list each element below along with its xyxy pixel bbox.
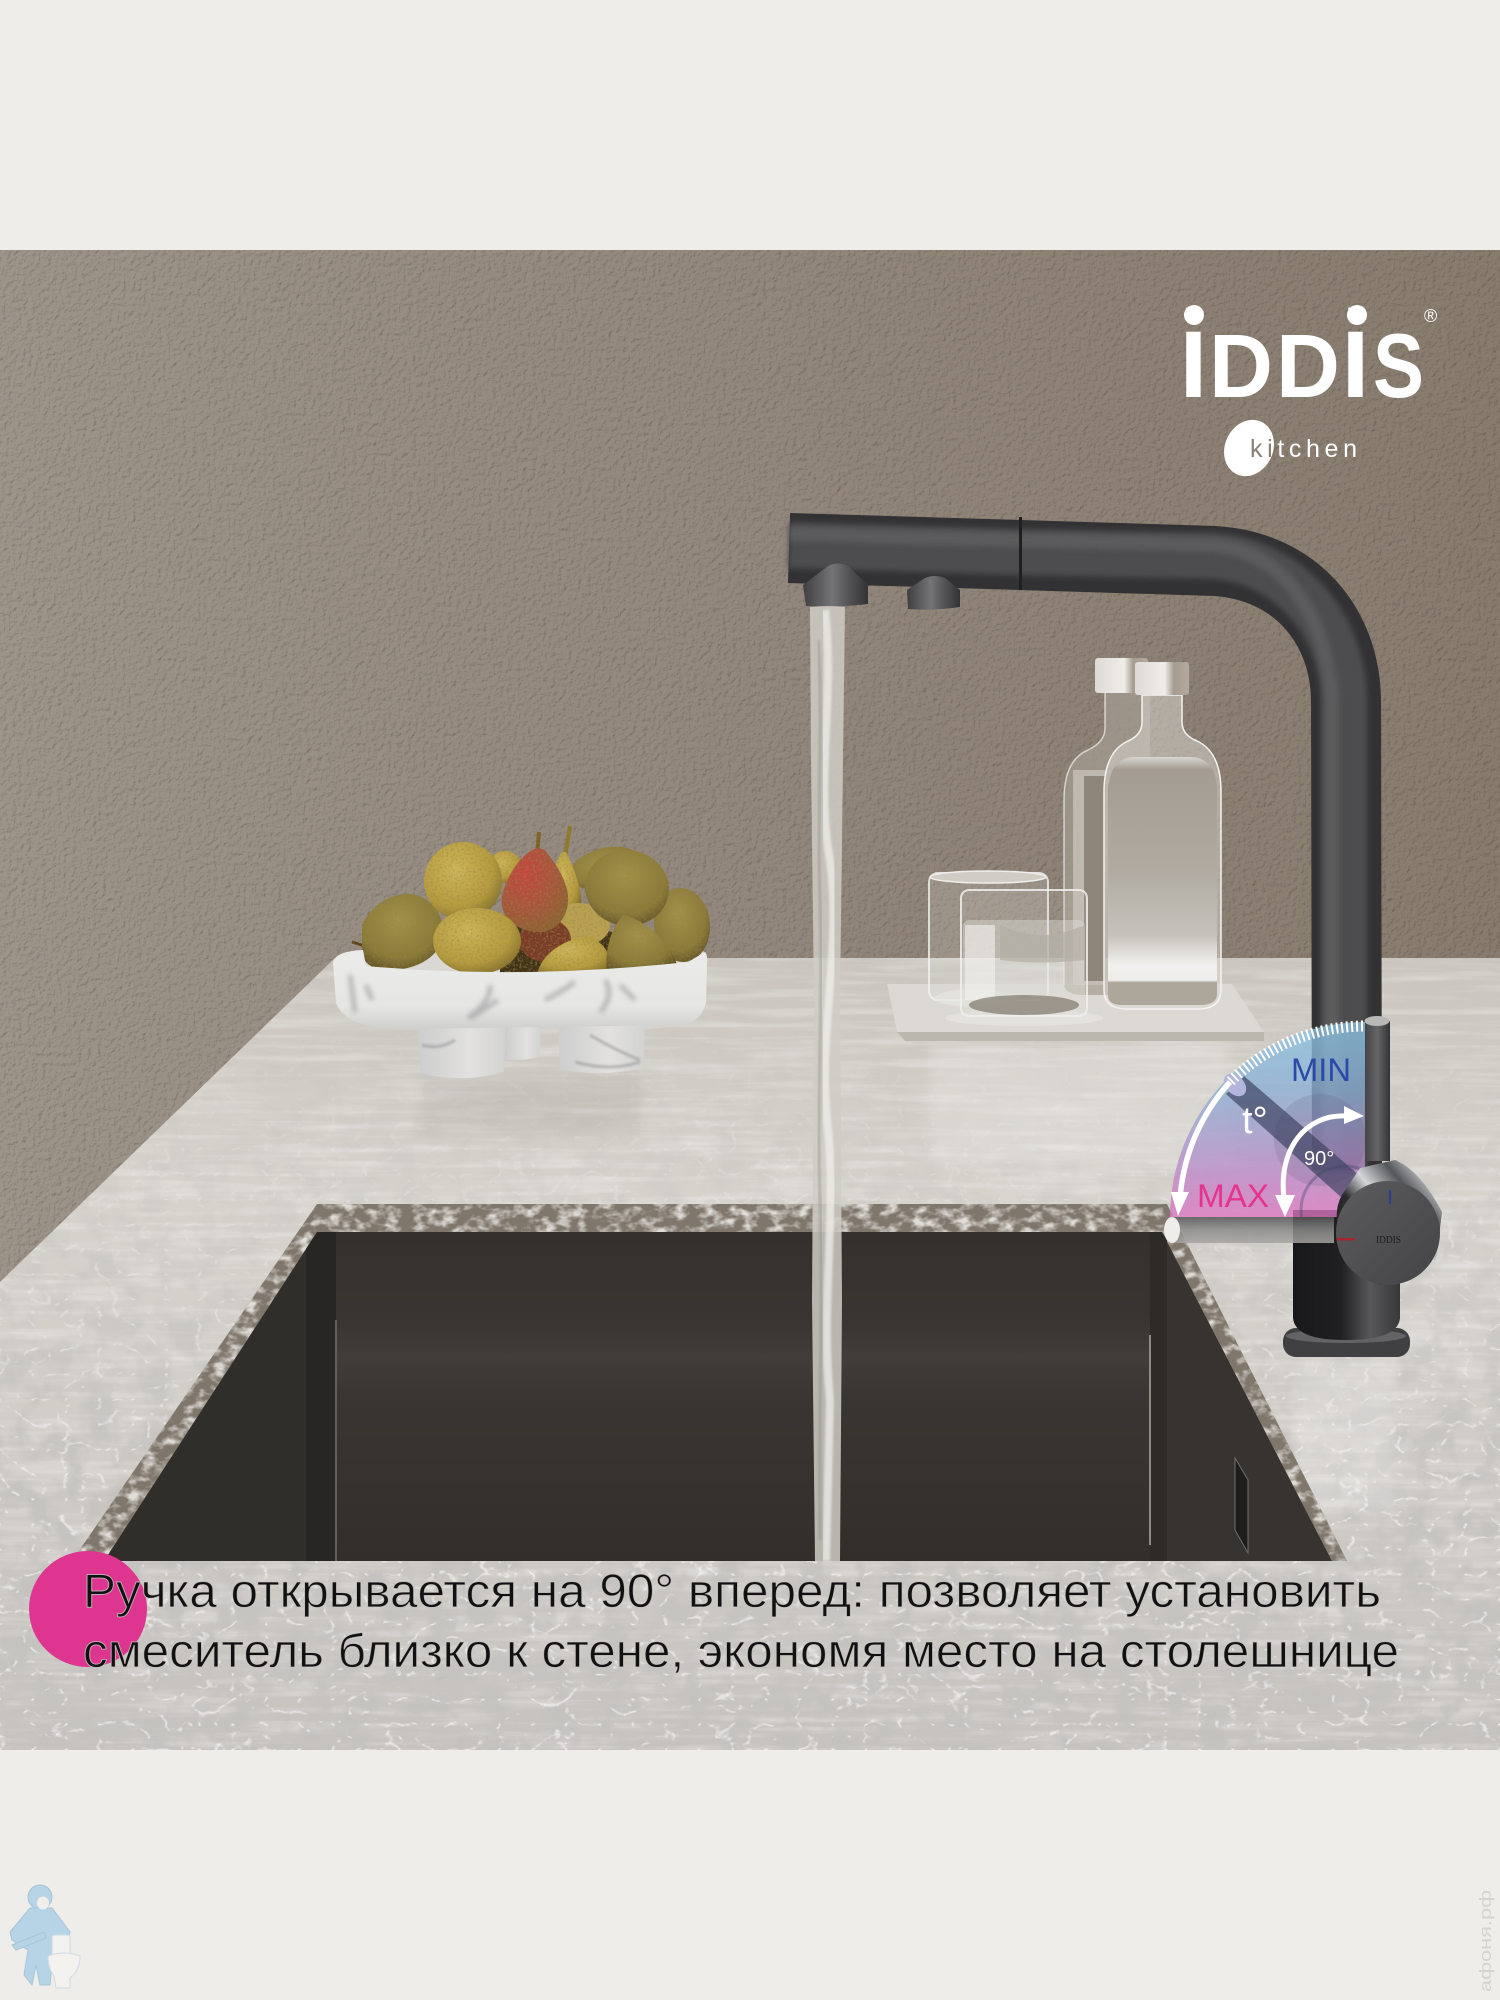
- temperature quadrant diagram: [1164, 1020, 1365, 1243]
- handle cylinder: [1337, 1160, 1442, 1285]
- label MAX: MAX: [1197, 1178, 1269, 1214]
- wordmark: D: [1209, 317, 1273, 417]
- plumber figure: [10, 1885, 70, 1985]
- tray with bottles and glasses: [887, 658, 1264, 1041]
- lever at max position: [1164, 1217, 1334, 1243]
- logo: iddis: [1179, 287, 1437, 484]
- caption: [29, 1551, 1399, 1677]
- back glass: [929, 871, 1048, 1007]
- faucet body: [1293, 1210, 1400, 1340]
- kitchen mark: [1215, 412, 1357, 484]
- faucet spout: [789, 517, 1347, 1170]
- water stream: [810, 606, 845, 1561]
- outer arrow to max: [1171, 1082, 1230, 1216]
- faucet base plate: [1283, 1328, 1410, 1357]
- sink stone rim: [72, 1204, 1347, 1561]
- pink blob: [29, 1551, 147, 1667]
- handle disc: [1336, 1181, 1440, 1285]
- bowl back rim: [340, 945, 707, 975]
- back bottle: [1064, 658, 1150, 995]
- handle logo: IDDIS: [1376, 1235, 1401, 1246]
- sink left wall: [104, 1232, 336, 1561]
- label MIN: MIN: [1291, 1052, 1351, 1088]
- registered mark: ®: [1424, 306, 1437, 326]
- countertop: [0, 958, 1500, 1750]
- wordmark: i: [1341, 287, 1370, 424]
- bowl rim: [333, 950, 707, 1029]
- lever at 45 degrees: [1219, 1069, 1360, 1198]
- watermark: plumber mascot: [10, 1885, 80, 1988]
- nozzle 2: [907, 576, 960, 610]
- wordmark: S: [1373, 316, 1424, 417]
- faucet lever and handle: [1336, 1016, 1442, 1285]
- quadrant fill: [1170, 1022, 1365, 1217]
- cold mark: [1389, 1190, 1391, 1204]
- plumber face: [37, 1896, 49, 1910]
- sink label sticker: [1235, 1458, 1248, 1553]
- faucet: [789, 517, 1410, 1561]
- sink corner highlights: [306, 1232, 1167, 1561]
- inner arrow 90 degrees: [1275, 1106, 1364, 1217]
- caption line 2: смеситель близко к стене, экономя место на столешнице: [83, 1624, 1399, 1677]
- wordmark: D: [1276, 317, 1340, 417]
- ghost circle behind lever: [1274, 1094, 1365, 1217]
- caption line 1: Ручка открывается на 90° вперед: позволяет установить: [83, 1564, 1381, 1617]
- wall: [0, 250, 1500, 1310]
- nozzle 1: [803, 564, 868, 607]
- vertical lever: [1364, 1016, 1390, 1161]
- front glass: [945, 890, 1103, 1026]
- fruit bowl with pears: [333, 826, 713, 1078]
- bowl legs: [418, 1020, 645, 1078]
- watermark: site name: афоня.рф: [1476, 1890, 1495, 1992]
- sink back wall: [336, 1232, 1152, 1561]
- label 90 degrees: 90°: [1304, 1148, 1334, 1170]
- kitchen mark: kitchen: [1250, 435, 1357, 463]
- sink: [72, 1204, 1347, 1561]
- sink right wall: [1150, 1232, 1332, 1561]
- hot mark: [1337, 1238, 1355, 1240]
- tick scale arc: [1230, 1026, 1363, 1082]
- label temperature: t°: [1242, 1100, 1268, 1142]
- wordmark: [1179, 287, 1424, 424]
- wordmark: i: [1179, 287, 1208, 424]
- photo: kitchen scene: [0, 250, 1500, 1750]
- pears: [352, 826, 713, 975]
- front bottle: [1104, 662, 1221, 1009]
- toilet: [48, 1935, 80, 1988]
- tray: [887, 984, 1264, 1041]
